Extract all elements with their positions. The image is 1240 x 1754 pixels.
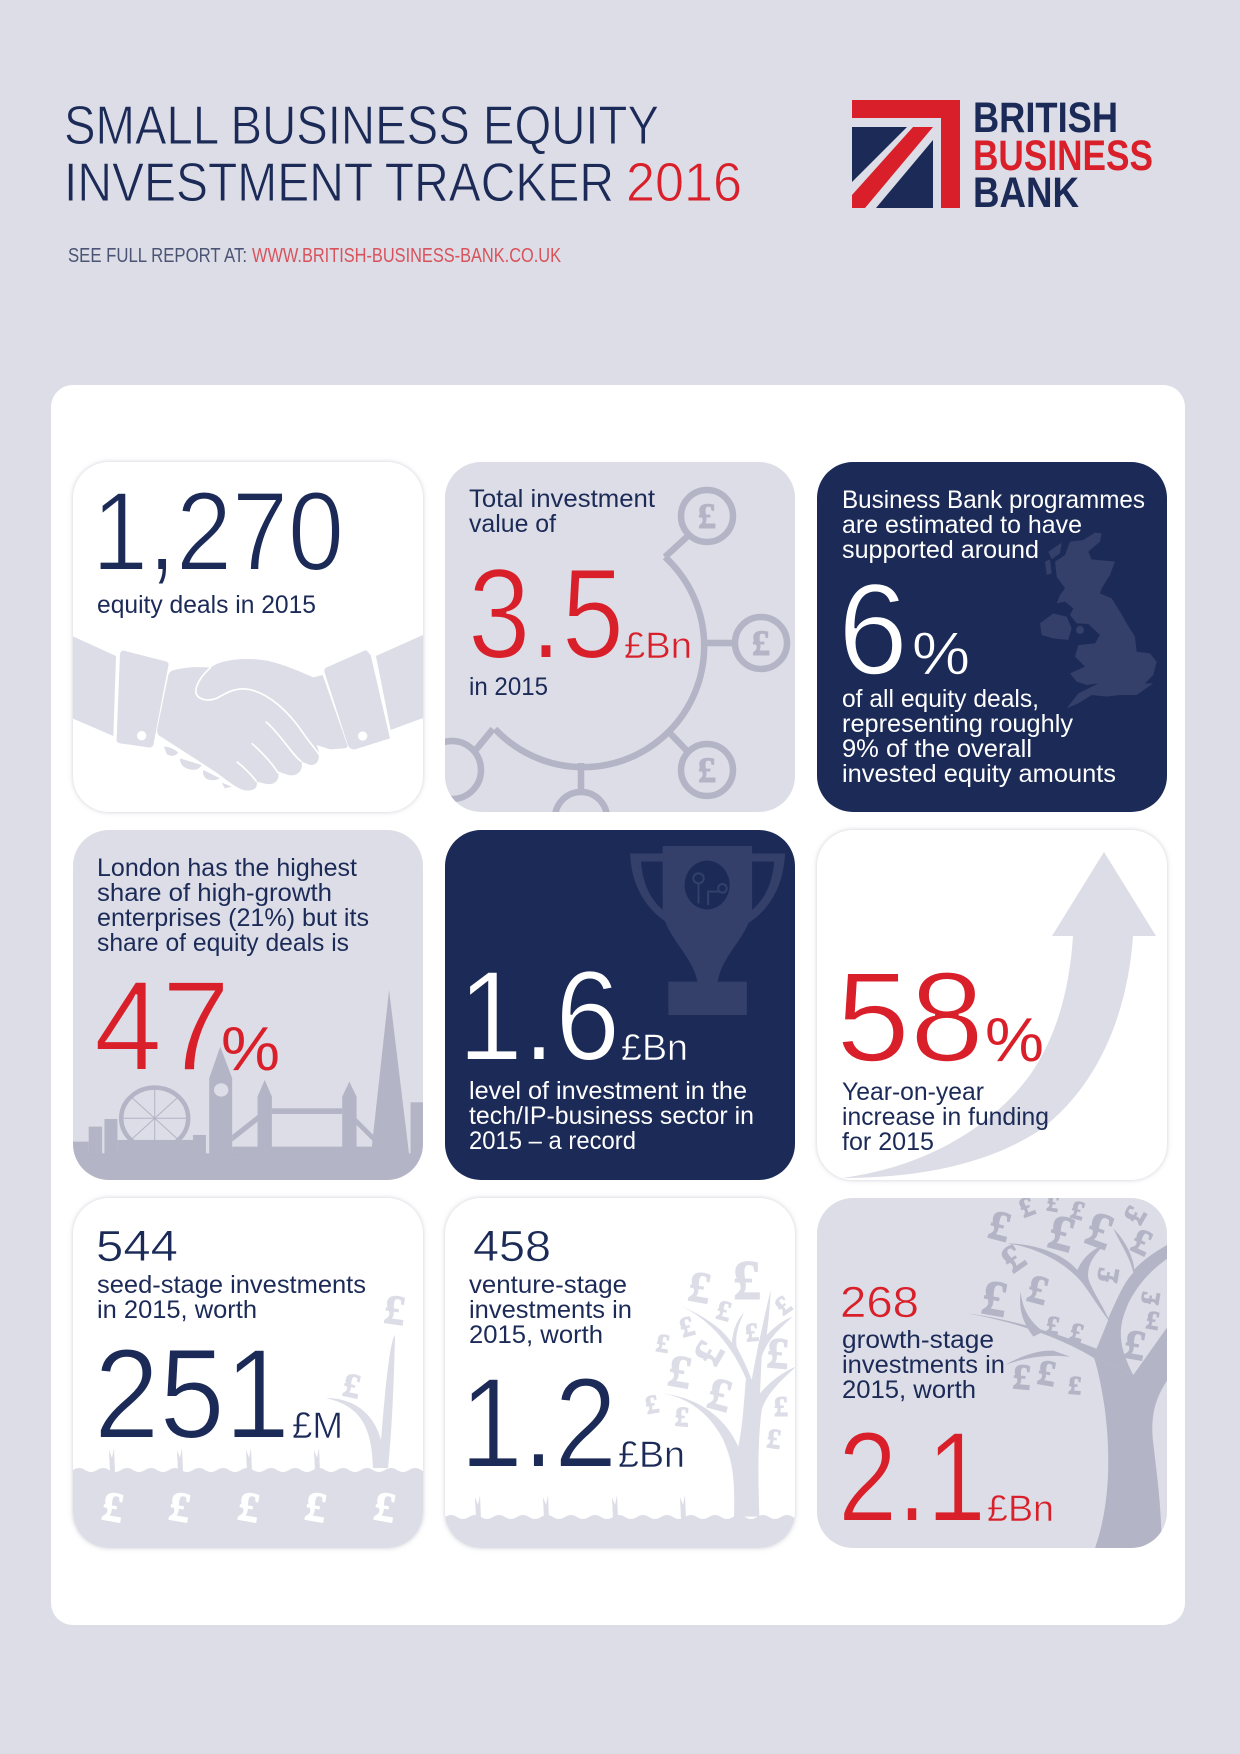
illustration: mature money tree: £ bbox=[984, 1202, 1016, 1252]
intro text: seed-stage investments bbox=[97, 1271, 366, 1299]
logo: British Business Bank bbox=[852, 94, 1153, 217]
illustration: mature money tree: £ bbox=[1043, 1203, 1081, 1263]
icon: handshake bbox=[70, 633, 427, 790]
illustration: ground and young money tree: £ bbox=[664, 1344, 696, 1399]
panel: 1,270 equity deals bbox=[70, 462, 427, 812]
title bbox=[64, 94, 742, 213]
title: 2016 bbox=[626, 151, 742, 213]
panel: growth-stage 2.1 £Bn bbox=[817, 1190, 1170, 1549]
stat: 1,270: 1,270 bbox=[92, 469, 344, 594]
stat: 458: 458 bbox=[473, 1222, 551, 1271]
body text: representing roughly bbox=[842, 710, 1074, 738]
illustration: ground and young money tree: £ bbox=[765, 1423, 783, 1456]
body text: 2015 – a record bbox=[469, 1127, 636, 1155]
illustration: mature money tree: £ bbox=[1045, 1190, 1061, 1218]
icon: pound network bbox=[445, 486, 790, 812]
illustration: mature money tree: £ bbox=[1135, 1289, 1166, 1307]
illustration: mature money tree: £ bbox=[994, 1236, 1033, 1281]
intro text: growth-stage bbox=[842, 1326, 994, 1354]
stat: 3.5 £Bn: 3.5 bbox=[468, 543, 624, 686]
logo: British Business Bank: BUSINESS bbox=[973, 132, 1153, 180]
caption: equity deals in 2015 bbox=[97, 591, 316, 619]
illustration: ground and young money tree: £ bbox=[770, 1290, 797, 1321]
icon: trophy bbox=[630, 846, 785, 1015]
logo: British Business Bank: BANK bbox=[973, 169, 1079, 217]
illustration: mature money tree: £ bbox=[1120, 1322, 1149, 1370]
body text bbox=[842, 685, 1116, 788]
stat: 1.2 £Bn: £Bn bbox=[618, 1434, 685, 1475]
icon: pound network: £ bbox=[698, 496, 716, 536]
illustration: ground, sprouts and seedling bbox=[73, 1287, 433, 1550]
intro text: share of high-growth bbox=[97, 879, 332, 907]
intro text: in 2015, worth bbox=[97, 1296, 257, 1324]
icon: London skyline bbox=[70, 990, 428, 1183]
body text bbox=[469, 1077, 754, 1155]
stat: 47%: 47 bbox=[94, 955, 230, 1098]
illustration: mature money tree: £ bbox=[1011, 1356, 1033, 1398]
illustration: ground and young money tree: £ bbox=[674, 1401, 690, 1434]
panel: Business Bank 6% bbox=[817, 462, 1167, 812]
stat: 251 £M: £M bbox=[292, 1405, 343, 1446]
illustration: ground and young money tree: £ bbox=[676, 1311, 698, 1344]
body text: for 2015 bbox=[842, 1128, 934, 1156]
illustration: ground and young money tree: £ bbox=[733, 1250, 761, 1312]
illustration: ground, sprouts and seedling: £ bbox=[301, 1484, 330, 1532]
intro text: enterprises (21%) but its bbox=[97, 904, 369, 932]
illustration: mature money tree: £ bbox=[978, 1268, 1012, 1328]
illustration: ground and young money tree: £ bbox=[765, 1328, 791, 1379]
intro text: Total investment bbox=[469, 485, 655, 513]
stat: 47%: % bbox=[221, 1015, 280, 1084]
intro text: London has the highest bbox=[97, 854, 357, 882]
stat: 1.6 £Bn: 1.6 bbox=[458, 945, 620, 1088]
report link line bbox=[68, 245, 562, 267]
stat: 2.1 £Bn: £Bn bbox=[987, 1488, 1054, 1529]
illustration: ground and young money tree: £ bbox=[684, 1333, 733, 1373]
body text: invested equity amounts bbox=[842, 760, 1116, 788]
illustration: mature money tree: £ bbox=[1079, 1199, 1121, 1261]
intro text bbox=[97, 854, 369, 957]
intro text bbox=[842, 1326, 1005, 1404]
intro text: Business Bank programmes bbox=[842, 486, 1145, 514]
illustration: ground, sprouts and seedling: £ bbox=[165, 1484, 194, 1532]
caption: in 2015 bbox=[469, 673, 548, 701]
illustration: ground and young money tree: £ bbox=[702, 1367, 738, 1422]
panel: London 47% bbox=[70, 830, 428, 1183]
illustration: ground, sprouts and seedling: £ bbox=[370, 1484, 399, 1532]
illustration: mature money tree bbox=[967, 1190, 1170, 1548]
stat: 58% bbox=[836, 946, 1044, 1089]
intro text bbox=[469, 485, 655, 538]
stat: 3.5 £Bn: £Bn bbox=[624, 625, 692, 666]
intro text bbox=[97, 1271, 366, 1324]
stat: 544: 544 bbox=[96, 1222, 178, 1271]
stat: 1.6 £Bn: £Bn bbox=[621, 1027, 688, 1068]
illustration: mature money tree: £ bbox=[1144, 1305, 1162, 1336]
illustration: mature money tree: £ bbox=[1067, 1317, 1087, 1348]
illustration: ground, sprouts and seedling: £ bbox=[340, 1367, 364, 1406]
illustration: ground and young money tree: £ bbox=[685, 1261, 715, 1314]
intro text: investments in bbox=[842, 1351, 1005, 1379]
illustration: mature money tree: £ bbox=[1091, 1265, 1126, 1285]
illustration: mature money tree: £ bbox=[1117, 1201, 1153, 1230]
logo flag mark bbox=[852, 100, 960, 208]
illustration: ground, sprouts and seedling: £ bbox=[234, 1484, 263, 1532]
intro text: share of equity deals is bbox=[97, 929, 349, 957]
illustration: ground, sprouts and seedling: £ bbox=[98, 1484, 127, 1532]
body text: level of investment in the bbox=[469, 1077, 747, 1105]
panel: venture-stage 1.2 £Bn bbox=[445, 1198, 805, 1550]
title: SMALL BUSINESS EQUITY bbox=[64, 94, 659, 156]
intro text: value of bbox=[469, 510, 556, 538]
illustration: ground and young money tree: £ bbox=[774, 1392, 788, 1423]
illustration: ground and young money tree bbox=[445, 1250, 805, 1550]
illustration: mature money tree: £ bbox=[1023, 1265, 1054, 1314]
intro text: venture-stage bbox=[469, 1271, 627, 1299]
panel: seed-stage 251 £M bbox=[73, 1198, 433, 1550]
illustration: mature money tree: £ bbox=[1044, 1310, 1062, 1341]
intro text: 2015, worth bbox=[842, 1376, 976, 1404]
title: INVESTMENT TRACKER bbox=[64, 151, 614, 213]
intro text: are estimated to have bbox=[842, 511, 1082, 539]
body text: Year-on-year bbox=[842, 1078, 984, 1106]
illustration: ground and young money tree: £ bbox=[643, 1389, 661, 1420]
intro text bbox=[842, 486, 1145, 564]
intro text: supported around bbox=[842, 536, 1039, 564]
illustration: mature money tree: £ bbox=[1035, 1352, 1059, 1394]
body text: 9% of the overall bbox=[842, 735, 1032, 763]
intro text: investments in bbox=[469, 1296, 632, 1324]
body text: tech/IP-business sector in bbox=[469, 1102, 754, 1130]
stat: 268: 268 bbox=[840, 1278, 919, 1327]
panel: 58% year-on-year bbox=[817, 830, 1167, 1180]
stat: 6% bbox=[838, 556, 970, 702]
stat: 6%: 6 bbox=[838, 556, 908, 702]
icon: UK map bbox=[1040, 533, 1157, 708]
illustration: mature money tree: £ bbox=[1015, 1191, 1039, 1224]
body text: increase in funding bbox=[842, 1103, 1049, 1131]
report link line: WWW.BRITISH-BUSINESS-BANK.CO.UK bbox=[252, 245, 562, 267]
logo: British Business Bank: BRITISH bbox=[973, 94, 1118, 142]
illustration: mature money tree: £ bbox=[1068, 1195, 1088, 1226]
panel: total investment 3.5 £Bn bbox=[445, 462, 795, 812]
report link line: SEE FULL REPORT AT: bbox=[68, 245, 247, 267]
illustration: ground and young money tree: £ bbox=[654, 1328, 672, 1359]
stat: 1.2 £Bn: 1.2 bbox=[460, 1352, 617, 1495]
stat: 251 £M: 251 bbox=[94, 1323, 290, 1466]
panel: tech/IP 1.6 £Bn bbox=[445, 830, 795, 1180]
illustration: ground and young money tree: £ bbox=[744, 1317, 760, 1348]
illustration: ground, sprouts and seedling: £ bbox=[381, 1287, 408, 1335]
intro text bbox=[469, 1271, 632, 1349]
icon: pound network: £ bbox=[752, 623, 770, 663]
illustration: ground and young money tree: £ bbox=[713, 1295, 735, 1328]
stat: 6%: % bbox=[912, 620, 970, 687]
stat: 58%: % bbox=[985, 1006, 1044, 1075]
intro text: 2015, worth bbox=[469, 1321, 603, 1349]
illustration: mature money tree: £ bbox=[1125, 1220, 1159, 1264]
stat: 2.1 £Bn: 2.1 bbox=[838, 1406, 986, 1549]
icon: pound network: £ bbox=[698, 750, 716, 790]
main white panel bbox=[51, 385, 1185, 1625]
icon: rising arrow bbox=[842, 852, 1156, 1178]
body text bbox=[842, 1078, 1049, 1156]
illustration: mature money tree: £ bbox=[1067, 1370, 1083, 1401]
body text: of all equity deals, bbox=[842, 685, 1039, 713]
stat: 58%: 58 bbox=[836, 946, 984, 1089]
